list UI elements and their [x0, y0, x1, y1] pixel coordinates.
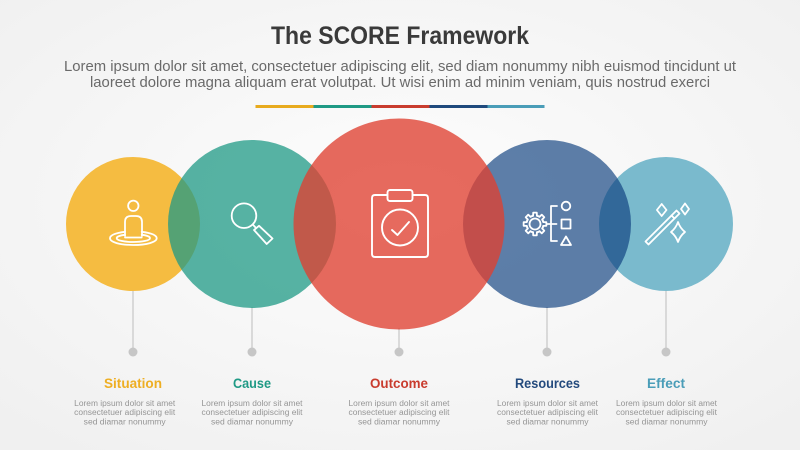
circle: situation — [66, 157, 200, 291]
item: cause: Cause — [233, 376, 271, 391]
icon: magnifier — [232, 203, 272, 244]
item: cause — [202, 376, 303, 426]
item: situation: sed diamar nonummy — [84, 418, 166, 426]
item: resources: Lorem ipsum dolor sit amet — [497, 399, 599, 408]
item: situation: Situation — [104, 376, 162, 391]
item: outcome: sed diamar nonummy — [358, 418, 440, 426]
subtitle text block: Lorem ipsum dolor sit amet, consectetuer adipiscing elit, sed diam nonummy nibh euismod tincidunt ut — [64, 59, 736, 75]
multicolour title rule — [256, 105, 544, 108]
item: effect: Effect — [647, 376, 686, 391]
item: effect: consectetuer adipiscing elit — [616, 408, 718, 417]
item: cause: Lorem ipsum dolor sit amet — [202, 399, 303, 408]
circle: outcome — [294, 118, 504, 330]
item: effect — [616, 376, 718, 426]
icon: magic wand with sparkles — [646, 204, 689, 244]
connector stems and dots — [128, 290, 670, 356]
item: resources: consectetuer adipiscing elit — [497, 408, 599, 417]
item: resources: Resources — [515, 376, 580, 391]
subtitle text block — [64, 59, 736, 91]
subtitle text block: laoreet dolore magna aliquam erat volutpat. Ut wisi enim ad minim veniam, quis nostrud exerci — [90, 75, 710, 91]
item: effect: sed diamar nonummy — [626, 418, 708, 426]
item: situation: Lorem ipsum dolor sit amet — [74, 399, 176, 408]
item: outcome: Lorem ipsum dolor sit amet — [348, 399, 450, 408]
item: outcome: consectetuer adipiscing elit — [348, 408, 450, 417]
circle: effect — [599, 157, 733, 291]
title: The SCORE Framework — [271, 22, 529, 50]
item: situation: consectetuer adipiscing elit — [74, 408, 176, 417]
icon: person in target — [110, 201, 157, 245]
icon: gear with shape hierarchy — [524, 202, 571, 245]
item: cause: consectetuer adipiscing elit — [202, 408, 303, 417]
circle: cause — [168, 140, 336, 308]
item: cause: sed diamar nonummy — [211, 418, 293, 426]
item: outcome: Outcome — [370, 376, 428, 391]
item: resources: sed diamar nonummy — [506, 418, 589, 426]
item: effect: Lorem ipsum dolor sit amet — [616, 399, 718, 408]
item: situation — [74, 376, 176, 426]
icon: clipboard with check — [372, 190, 428, 257]
circle: resources — [463, 140, 631, 308]
item: resources — [497, 376, 599, 426]
item: outcome — [348, 376, 450, 426]
